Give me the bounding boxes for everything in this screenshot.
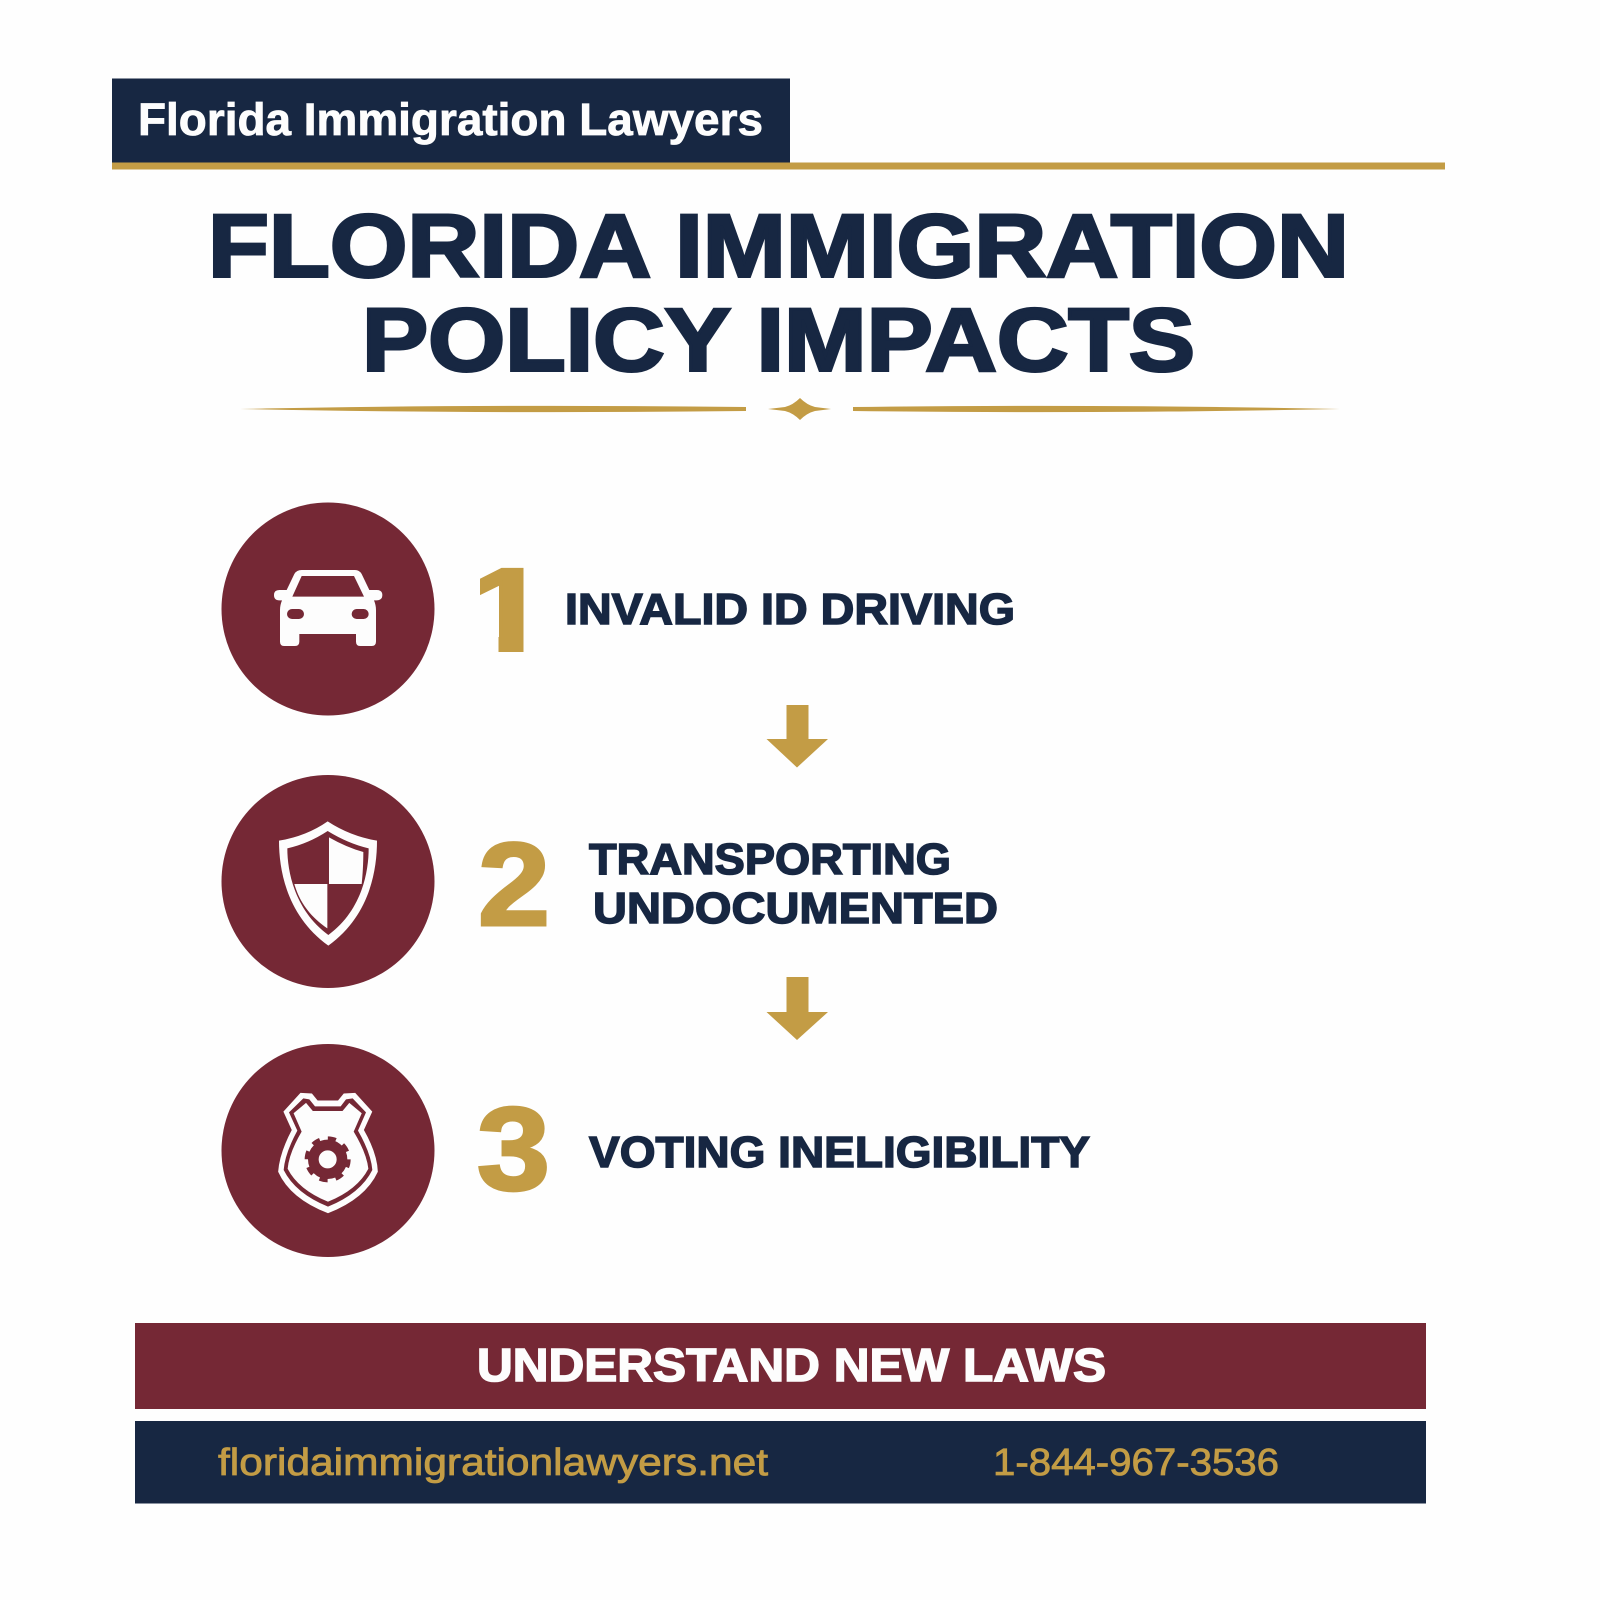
step 1 [222,502,1015,716]
step 2 [222,775,998,988]
contact bar [135,1421,1426,1504]
label: transporting undocumented: UNDOCUMENTED [593,884,998,933]
step 3 [222,1044,1090,1257]
icon: badge with gear [222,1044,434,1257]
website: floridaimmigrationlawyers.net [218,1442,768,1484]
label: voting ineligibility: VOTING INELIGIBILITY [589,1128,1090,1177]
title line 2: POLICY IMPACTS [362,290,1195,390]
call to action text: UNDERSTAND NEW LAWS [477,1339,1106,1391]
gold rule [112,162,1445,170]
header banner [112,78,1445,170]
title [208,196,1349,390]
icon: shield [222,775,434,988]
title ornament [240,398,1340,420]
label: transporting undocumented: TRANSPORTING [589,835,951,884]
label: transporting undocumented [589,835,998,933]
brand name: Florida Immigration Lawyers [138,94,763,145]
title line 1: FLORIDA IMMIGRATION [208,196,1349,296]
label: invalid id driving: INVALID ID DRIVING [565,585,1015,634]
call to action banner [135,1323,1426,1409]
arrow 2 [766,977,828,1040]
number 3: 3 [477,1084,550,1216]
icon: car [222,502,434,716]
number 1: 1 [466,544,550,676]
arrow 1 [766,705,828,768]
phone: 1-844-967-3536 [993,1442,1279,1484]
number 2: 2 [478,819,550,951]
navy brand bar [112,78,790,162]
